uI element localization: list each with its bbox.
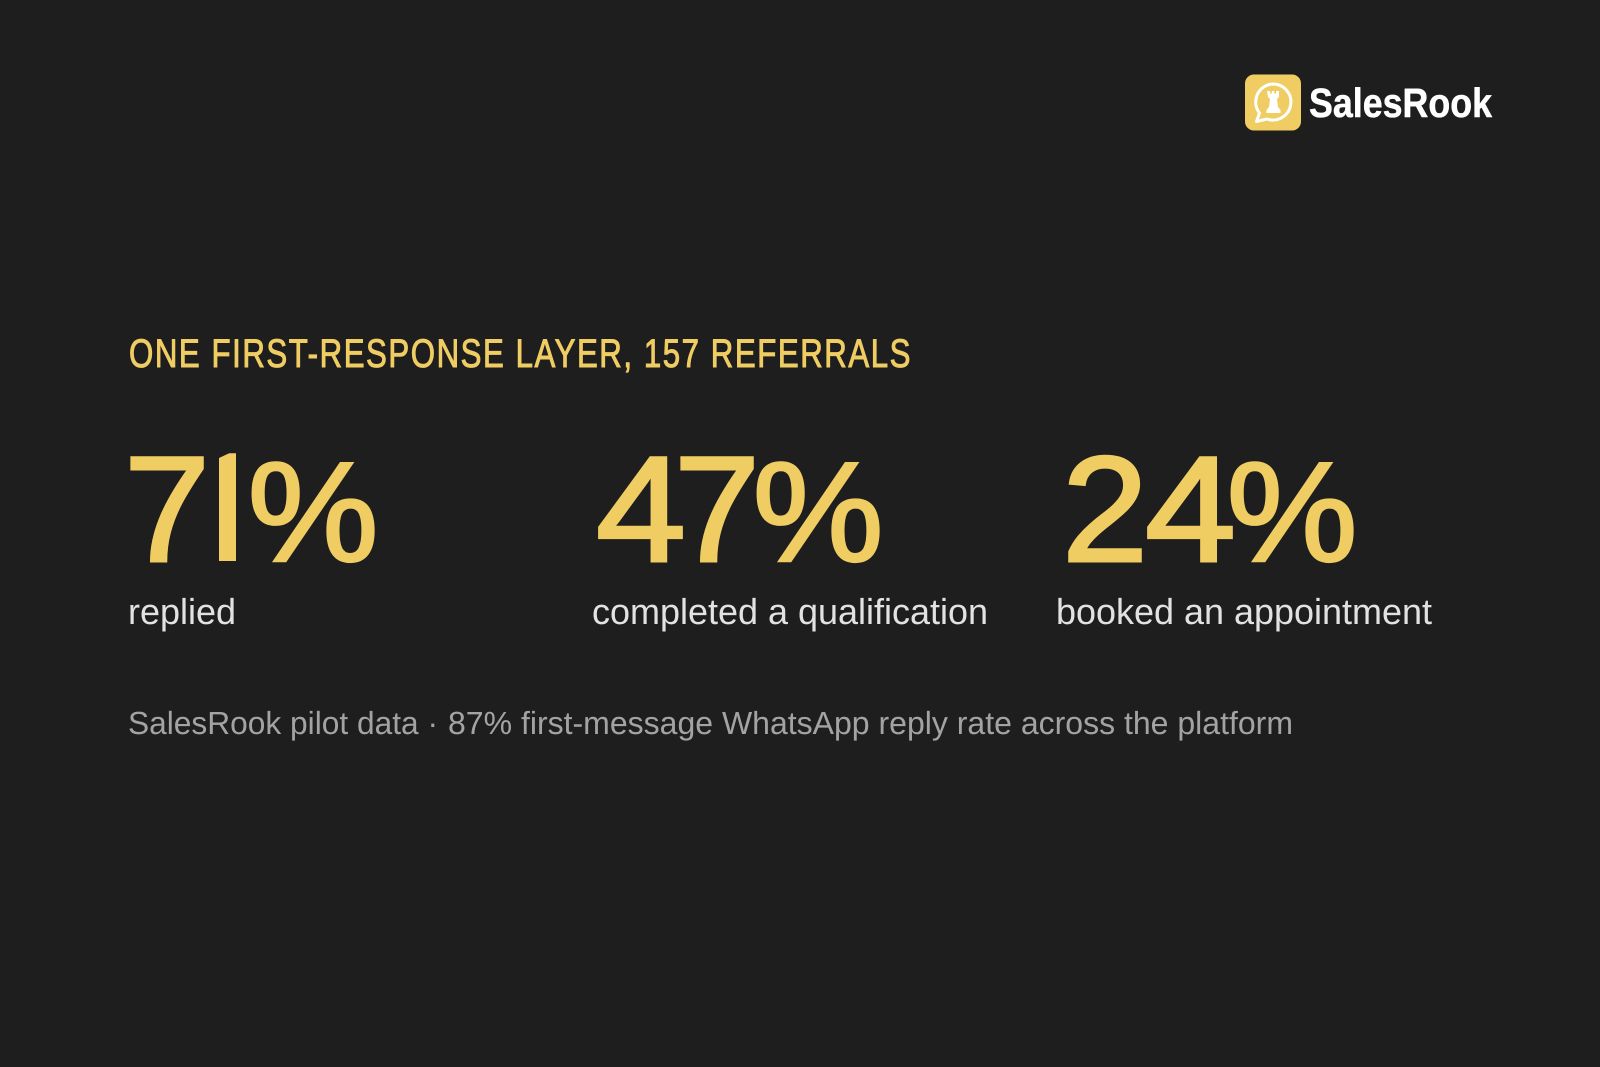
label: booked an appointment xyxy=(1056,591,1432,632)
stat: 24% booked an appointment xyxy=(1056,425,1432,632)
label: completed a qualification xyxy=(592,591,988,632)
number: 7 xyxy=(674,425,760,593)
number: 2 xyxy=(1062,425,1148,593)
stat: 47% completed a qualification xyxy=(592,425,988,632)
number: 4 xyxy=(596,425,686,593)
footnote: SalesRook pilot data · xyxy=(128,705,438,741)
number: 7 xyxy=(124,425,210,593)
logo: SalesRook xyxy=(1245,74,1492,130)
footnote: 87% first-message WhatsApp reply rate across the platform xyxy=(448,705,1293,741)
wordmark: SalesRook xyxy=(1309,80,1492,126)
number: % xyxy=(1227,433,1358,592)
icon: rook in speech bubble xyxy=(1245,74,1301,130)
number: % xyxy=(248,433,379,592)
heading: ONE FIRST-RESPONSE LAYER, 157 REFERRALS xyxy=(129,332,912,376)
number xyxy=(130,453,375,564)
number xyxy=(596,425,884,593)
number xyxy=(1062,425,1358,593)
number: 1 xyxy=(182,425,266,593)
number: 4 xyxy=(1145,425,1236,593)
number: % xyxy=(753,433,884,592)
stat: 71% replied xyxy=(130,453,375,632)
label: replied xyxy=(128,591,236,632)
